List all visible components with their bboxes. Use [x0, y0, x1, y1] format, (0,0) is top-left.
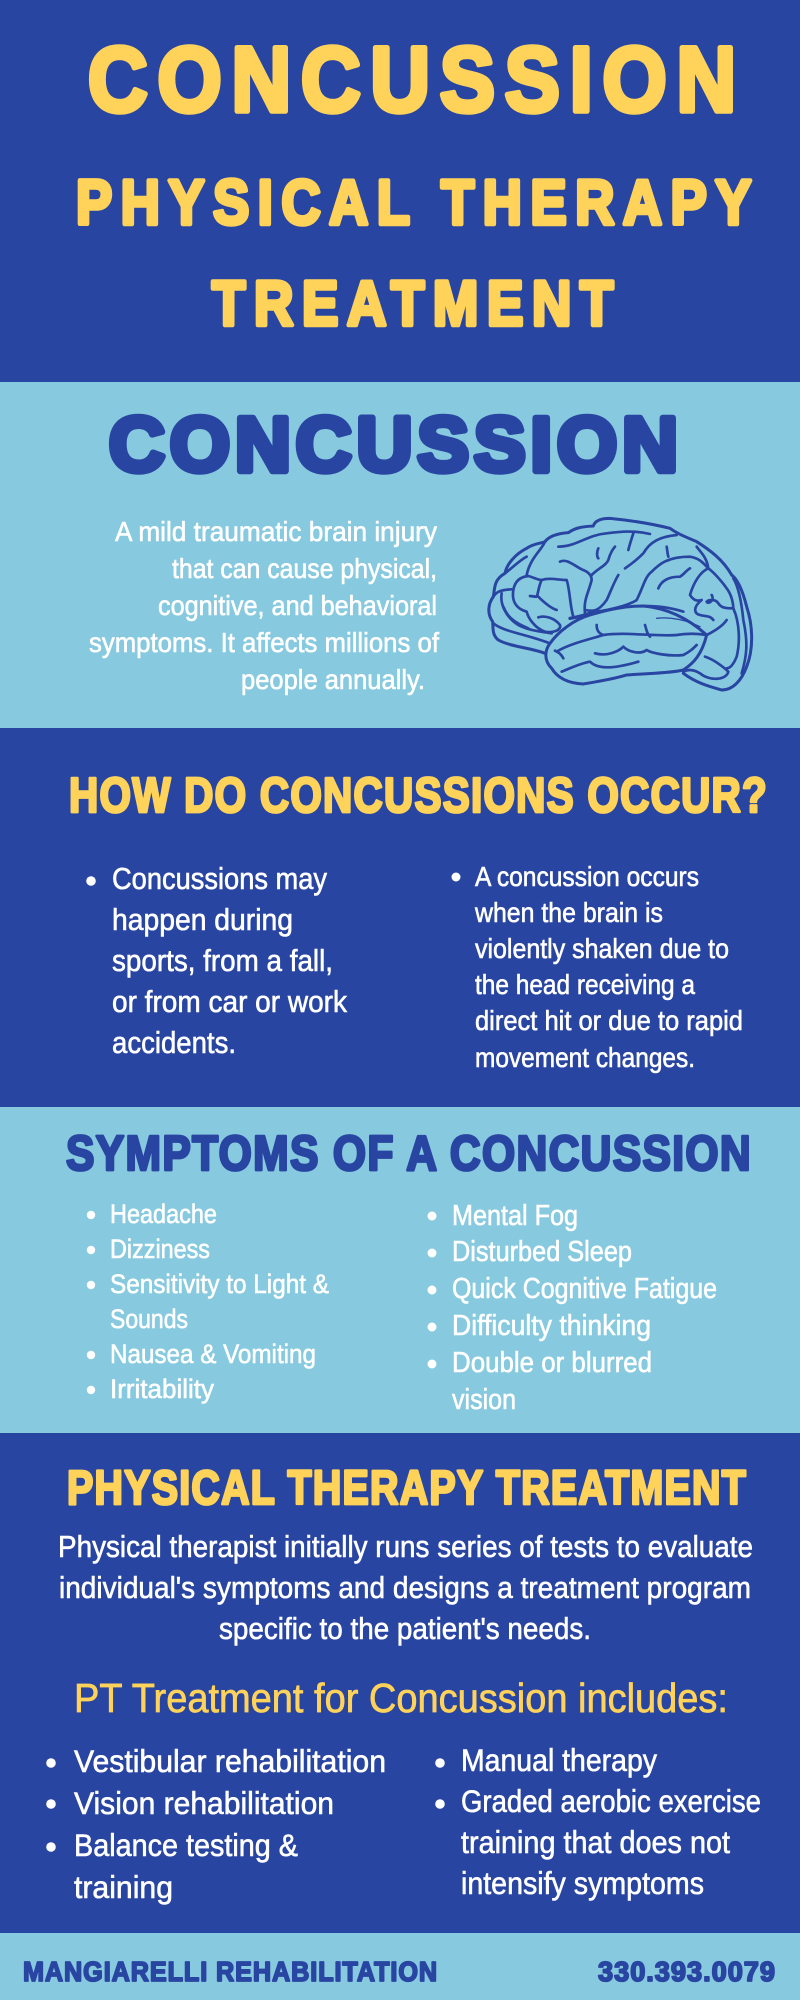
- symptom list: left: Irritability: [110, 1374, 214, 1404]
- symptom list: left: Headache: [110, 1199, 217, 1229]
- title: concussion: CONCUSSION: [88, 29, 746, 131]
- treatment list: left: Vestibular rehabilitation: [74, 1743, 386, 1779]
- treatment description: specific to the patient's needs.: [219, 1611, 591, 1646]
- symptom list: right: Difficulty thinking: [452, 1310, 651, 1342]
- bullet list: left: accidents.: [112, 1026, 236, 1060]
- icon: brain: [489, 518, 752, 690]
- symptom list: left: Sensitivity to Light &: [110, 1269, 329, 1299]
- treatment list: right: training that does not: [461, 1824, 730, 1860]
- bullet list: left: [86, 862, 348, 1060]
- bullet list: left: or from car or work: [112, 985, 348, 1019]
- definition text: cognitive, and behavioral: [158, 590, 437, 621]
- treatment list: left: Vision rehabilitation: [74, 1785, 334, 1821]
- panel: concussion definition: [0, 382, 800, 728]
- treatment list: left: Balance testing &: [74, 1827, 298, 1863]
- organization name: MANGIARELLI REHABILITATION: [23, 1956, 438, 1987]
- treatment list: left: training: [74, 1869, 173, 1905]
- definition text: that can cause physical,: [172, 553, 437, 584]
- bullet list: right: movement changes.: [475, 1042, 695, 1073]
- bullet list: right: when the brain is: [474, 897, 663, 928]
- treatment list: right: Manual therapy: [461, 1742, 657, 1778]
- bullet list: right: [452, 861, 743, 1073]
- bullet list: right: violently shaken due to: [475, 933, 729, 964]
- symptom list: right: Mental Fog: [452, 1200, 578, 1232]
- symptom list: right: [428, 1200, 717, 1416]
- panel: symptoms: [0, 1107, 800, 1433]
- panel: how do concussions occur: [0, 728, 800, 1107]
- panel: physical therapy treatment: [0, 1433, 800, 1933]
- symptom list: left: Dizziness: [110, 1234, 210, 1264]
- bullet list: right: direct hit or due to rapid: [475, 1005, 743, 1036]
- symptom list: left: Nausea & Vomiting: [110, 1339, 316, 1369]
- symptom list: right: Double or blurred: [452, 1347, 652, 1379]
- bullet list: right: A concussion occurs: [475, 861, 699, 892]
- title: treatment: TREATMENT: [212, 269, 622, 339]
- treatment list: right: Graded aerobic exercise: [461, 1783, 761, 1819]
- symptom list: left: Sounds: [110, 1304, 188, 1334]
- definition text: people annually.: [241, 664, 425, 695]
- treatment list: right: [435, 1742, 761, 1901]
- symptom list: right: Disturbed Sleep: [452, 1236, 632, 1268]
- bullet list: right: the head receiving a: [475, 969, 695, 1000]
- treatment list: left: [46, 1743, 386, 1905]
- definition text: symptoms. It affects millions of: [89, 627, 439, 658]
- bullet list: left: sports, from a fall,: [112, 944, 333, 978]
- bullet list: left: happen during: [112, 903, 293, 937]
- definition text: A mild traumatic brain injury: [115, 516, 437, 547]
- phone number: 330.393.0079: [598, 1956, 776, 1987]
- symptom list: left: [87, 1199, 329, 1404]
- heading: concussion: CONCUSSION: [109, 402, 683, 488]
- bullet list: left: Concussions may: [112, 862, 328, 896]
- treatment list: right: intensify symptoms: [461, 1865, 704, 1901]
- subheading: pt treatment includes: PT Treatment for Concussion includes:: [74, 1675, 728, 1721]
- symptom list: right: Quick Cognitive Fatigue: [452, 1273, 717, 1305]
- definition text: [89, 516, 439, 695]
- symptom list: right: vision: [452, 1384, 516, 1416]
- treatment description: [58, 1529, 753, 1646]
- panel: footer: [0, 1933, 800, 2000]
- panel: title banner: [0, 0, 800, 382]
